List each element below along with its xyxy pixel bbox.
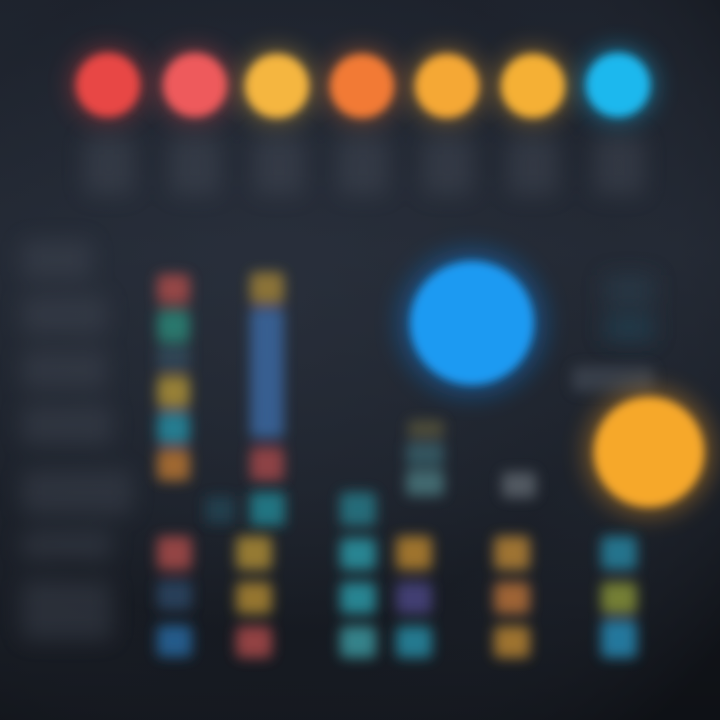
bottom column 2 [236,536,272,658]
column of tiles 1 [157,274,190,481]
circle: amber [407,46,487,126]
circle: red [68,45,148,125]
bottom column 6 [601,536,637,658]
left text column [22,240,132,640]
bottom column 4 [396,536,432,658]
middle teal tiles [205,492,285,526]
centre small tiles [406,420,536,498]
circle: yellow [237,46,317,126]
label near orange circle [572,366,654,392]
bottom column 5 [494,536,530,658]
right small tiles [604,275,654,341]
row of coloured status circles [68,45,658,126]
circle: coral [155,45,235,125]
column of tiles 2 [250,272,284,481]
big blue circle [396,247,548,399]
circle: orange [322,46,402,126]
circle: amber 2 [493,46,573,126]
bottom column 1 [157,536,192,657]
big orange circle [583,386,715,518]
bottom column 3 teal [340,492,376,658]
captions under circles [84,135,644,195]
circle: cyan [578,45,658,125]
